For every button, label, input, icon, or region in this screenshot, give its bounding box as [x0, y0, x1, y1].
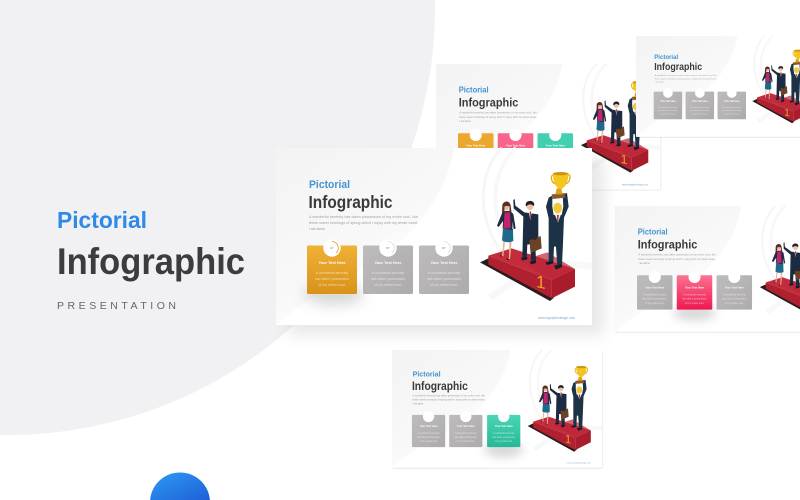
- card: gray 2: 50°: [386, 246, 390, 250]
- panel: slide top right: of my entire soul.: [724, 113, 740, 116]
- panel: slide top right: has taken possession: [658, 109, 678, 112]
- panel: slide top middle: Your Text Here: [506, 143, 526, 147]
- card: gray 3: [419, 239, 469, 294]
- panel: main slide: A wonderful serenity has taken possession of my entire soul, like: [309, 215, 418, 219]
- background: large gray circle: [0, 0, 435, 435]
- panel: slide right middle: A wonderful serenity: [683, 292, 707, 296]
- panel: slide top middle: www.rsgraphicdesign.com: [622, 184, 648, 186]
- card: gray 2: A wonderful serenity: [372, 271, 404, 275]
- panel: slide top middle: Pictorial: [459, 85, 489, 94]
- panel: slide right middle: I am alone: [638, 261, 650, 265]
- panel: slide top right: Pictorial: [654, 54, 678, 61]
- panel: slide top middle: 1: [621, 152, 628, 167]
- panel: slide right middle: these sweet mornings of spring which I enjoy with my whole heart.: [638, 257, 716, 261]
- panel: slide right middle: Infographic: [638, 238, 697, 252]
- card: gray 3: A wonderful serenity: [428, 271, 460, 275]
- panel: main slide: [276, 148, 604, 335]
- card: gray 2: has taken possession: [371, 277, 405, 281]
- panel: slide top middle: [436, 64, 661, 190]
- panel: slide bottom: A wonderful serenity: [493, 432, 515, 435]
- card: orange: 40°: [330, 246, 334, 250]
- panel: slide right middle: [615, 206, 800, 333]
- decorative blue circle: [150, 472, 210, 500]
- panel: slide bottom: has taken possession: [417, 436, 441, 439]
- panel: slide bottom: Your Text Here: [457, 424, 475, 428]
- panel: slide right middle: Your Text Here: [685, 285, 705, 289]
- card: gray 3: of my entire soul.: [430, 283, 458, 287]
- panel: slide bottom: has taken possession: [454, 436, 478, 439]
- panel: slide bottom: of my entire soul.: [495, 440, 513, 443]
- panel: slide top right: of my entire soul.: [692, 113, 708, 116]
- panel: slide top right: I am alone: [655, 82, 665, 84]
- panel: slide top right: has taken possession: [690, 109, 710, 112]
- podium number: 1: [536, 271, 546, 293]
- panel: slide right middle: of my entire soul.: [685, 301, 705, 305]
- panel: slide bottom: of my entire soul.: [457, 440, 475, 443]
- panel: slide top right: [636, 36, 800, 138]
- panel: slide bottom: A wonderful serenity: [455, 432, 477, 435]
- card: gray 3: 60°: [442, 246, 446, 250]
- heading: Pictorial: Pictorial: [57, 207, 147, 233]
- card: gray 2: [363, 239, 413, 294]
- panel: slide right middle: Your Text Here: [725, 285, 744, 289]
- panel: slide top right: A wonderful serenity has taken possession of my entire soul, like: [655, 74, 718, 77]
- panel: main slide: I am alone: [309, 227, 325, 231]
- panel: slide top right: Infographic: [654, 62, 703, 73]
- podium and figures with trophy: [480, 172, 575, 301]
- card: orange: has taken possession: [315, 277, 349, 281]
- panel: main slide: these sweet mornings of spring which I enjoy with my whole heart.: [309, 221, 418, 225]
- card: orange: [307, 239, 357, 294]
- panel: slide top right: 1: [784, 107, 790, 119]
- panel: main slide: Infographic: [308, 192, 393, 212]
- panel: main slide: Pictorial: [309, 179, 350, 191]
- panel: slide bottom: of my entire soul.: [420, 440, 438, 443]
- panel: slide top right: has taken possession: [722, 109, 742, 112]
- panel: slide right middle: has taken possession: [643, 297, 668, 301]
- panel: slide top right: these sweet mornings of spring which I enjoy with my whole heart.: [655, 77, 717, 80]
- card: gray 3: Your Text Here: [430, 260, 458, 265]
- card: gray 2: of my entire soul.: [374, 283, 402, 287]
- panel: slide top middle: I am alone: [459, 119, 471, 123]
- heading: Infographic: Infographic: [57, 241, 245, 282]
- panel: slide bottom: www.rsgraphicdesign.com: [566, 463, 591, 465]
- panel: slide right middle: A wonderful serenity: [723, 292, 746, 296]
- card: gray 2: Your Text Here: [374, 260, 402, 265]
- panel: slide bottom: has taken possession: [492, 436, 516, 439]
- card: orange: A wonderful serenity: [316, 271, 348, 275]
- panel: slide bottom: A wonderful serenity has taken possession of my entire soul, like: [413, 395, 486, 398]
- panel: slide bottom: [392, 350, 603, 469]
- panel: slide right middle: Pictorial: [638, 227, 668, 236]
- panel: slide top right: A wonderful serenity: [659, 106, 678, 109]
- panel: slide bottom: 1: [565, 433, 571, 447]
- card: orange: Your Text Here: [318, 260, 346, 265]
- panel: slide bottom: Infographic: [412, 380, 468, 393]
- panel: slide bottom: these sweet mornings of spring which I enjoy with my whole heart.: [413, 399, 485, 402]
- website credit: www.rsgraphicdesign.com: [538, 316, 575, 320]
- panel: slide bottom: Your Text Here: [495, 424, 513, 428]
- panel: slide top right: A wonderful serenity: [723, 106, 742, 109]
- panel: slide bottom: Your Text Here: [420, 424, 438, 428]
- panel: slide right middle: has taken possession: [682, 297, 707, 301]
- panel: slide right middle: of my entire soul.: [725, 301, 744, 305]
- panel: slide top middle: Your Text Here: [466, 143, 486, 147]
- card: orange: of my entire soul.: [318, 283, 346, 287]
- panel: slide bottom: Pictorial: [413, 370, 441, 379]
- panel: slide bottom: A wonderful serenity: [418, 432, 440, 435]
- panel: slide right middle: A wonderful serenity: [643, 292, 667, 296]
- card: gray 3: has taken possession: [427, 277, 461, 281]
- panel: slide top right: of my entire soul.: [660, 113, 676, 116]
- panel: slide top middle: A wonderful serenity has taken possession of my entire soul, like: [459, 111, 537, 115]
- panel: slide bottom: I am alone: [413, 403, 424, 406]
- panel: slide top right: Your Text Here: [692, 100, 708, 103]
- panel: slide top middle: Your Text Here: [546, 143, 565, 147]
- panel: slide top right: A wonderful serenity: [691, 106, 710, 109]
- panel: slide top middle: Infographic: [459, 96, 518, 110]
- panel: slide top middle: these sweet mornings of spring which I enjoy with my whole heart.: [459, 115, 537, 119]
- panel: slide right middle: A wonderful serenity has taken possession of my entire soul, like: [638, 253, 716, 257]
- panel: slide top right: Your Text Here: [724, 100, 740, 103]
- panel: slide right middle: of my entire soul.: [645, 301, 665, 305]
- subheading: presentation: PRESENTATION: [57, 300, 176, 312]
- panel: slide top right: Your Text Here: [660, 100, 676, 103]
- panel: slide right middle: Your Text Here: [645, 285, 665, 289]
- panel: slide right middle: has taken possession: [722, 297, 747, 301]
